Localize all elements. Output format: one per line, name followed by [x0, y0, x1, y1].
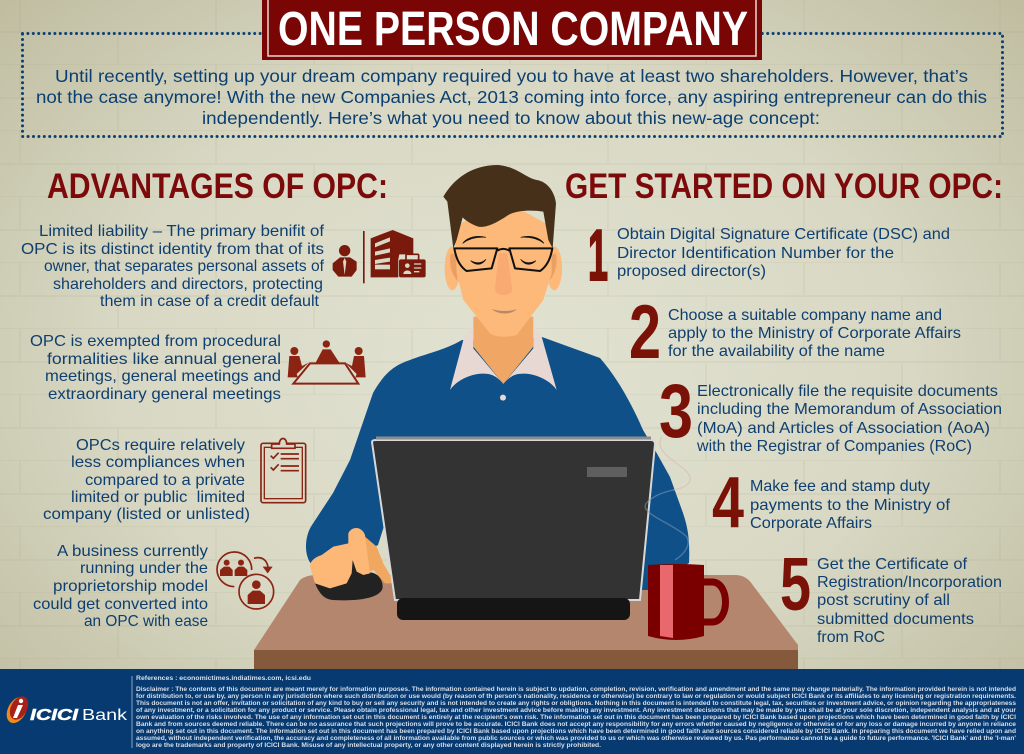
ICICI Bank logo: ICICI: [30, 707, 79, 724]
advantage 3 text: company (listed or unlisted): [43, 506, 250, 523]
intro text: not the case anymore! With the new Companies Act, 2013 coming into force, any aspiring entrepreneur can do this: [36, 87, 987, 107]
step 2: apply to the Ministry of Corporate Affairs: [668, 325, 961, 342]
advantage 3 text: compared to a private: [85, 472, 245, 489]
footer band: [0, 669, 1024, 754]
advantage 4 text: an OPC with ease: [84, 613, 208, 630]
references: References : economictimes.indiatimes.com, icsi.edu: [136, 675, 311, 682]
advantage 1 text: Limited liability – The primary benifit of: [39, 223, 325, 240]
step 3: [659, 369, 1002, 455]
intro text: independently. Here’s what you need to know about this new-age concept:: [202, 108, 820, 128]
hand on mouse: [310, 528, 395, 600]
step 1: proposed director(s): [617, 263, 766, 280]
advantage 1 text: shareholders and directors, protecting: [53, 276, 323, 293]
disclaimer: logo are the trademarks and property of ICICI Bank. Misuse of any intellectual property, or any other content displayed herein is strictly prohibited.: [136, 742, 601, 749]
advantage 2 text: formalities like annual general: [47, 351, 281, 368]
head: [443, 165, 562, 401]
disclaimer: of any investment, or a solicitation for any product or service. Please obtain professional legal, tax and other investment advice before making any investment. Any investment decisions that may be made by you shall be at your sole discretion, independent analysis and at your: [136, 707, 1017, 714]
step 5: submitted documents: [817, 611, 974, 628]
step 5: [780, 542, 1002, 646]
disclaimer: assumed, without independent verification, the accuracy and completeness of all information available from public sources or which was provided to us or which was otherwise reviewed by us. Pas performance cannot be a guide to future performance. 'ICICI Bank' and the 'I-man': [136, 735, 1017, 742]
step 4: 4: [712, 463, 744, 543]
icon: conversion of ownership: [217, 552, 274, 609]
torso and sleeves: [306, 337, 689, 590]
disclaimer: Disclaimer : The contents of this document are meant merely for information purposes. The information contained herein is subject to updation, completion, revision, verification and amendment and the same may change materially. The information provided herein is not intended: [136, 686, 1016, 693]
advantage 4 text: [33, 543, 208, 630]
intro text: [36, 66, 987, 128]
disclaimer: Bank and from sources deemed reliable. There can be no assurance that such projections will prove to be accurate. ICICI Bank does not accept any responsibility for any errors whether caused by negligence or otherwise or for any loss or damage incurred by anyone in reliance: [136, 721, 1017, 728]
step 1: Obtain Digital Signature Certificate (DSC) and: [617, 226, 950, 243]
ICICI Bank logo: Bank: [82, 707, 128, 724]
step 3: Electronically file the requisite documents: [697, 383, 998, 400]
step 2: [629, 290, 961, 375]
step 3: with the Registrar of Companies (RoC): [696, 438, 972, 455]
step 1: Director Identification Number for the: [617, 245, 894, 262]
advantage 3 text: less compliances when: [71, 454, 245, 471]
step 4: [712, 463, 951, 543]
advantage 4 text: could get converted into: [33, 596, 208, 613]
heading: advantages: ADVANTAGES OF OPC:: [47, 167, 388, 206]
footer divider: [132, 676, 133, 748]
intro dotted frame: [22, 34, 1002, 136]
step 5: Registration/Incorporation: [817, 574, 1002, 591]
steam: [645, 437, 690, 560]
title banner: ONE PERSON COMPANY: [278, 3, 748, 56]
advantage 3 text: limited or public limited: [71, 489, 245, 506]
advantage 1 text: [21, 223, 325, 310]
disclaimer: for distribution to, or use by, any person in any jurisdiction where such distribution or use would (by reason of th person's nationality, residence or otherwise) be contrary to law or regulation or would subject ICICI Bank or its affiliates to any licensing or registration requirements.: [136, 693, 1016, 700]
step 4: payments to the Ministry of: [750, 497, 951, 514]
step 1: [588, 216, 950, 296]
step 1: 1: [588, 216, 608, 296]
advantage 1 text: them in case of a credit default: [100, 293, 320, 310]
step 5: post scrutiny of all: [817, 592, 950, 609]
step 2: Choose a suitable company name and: [668, 307, 942, 324]
advantage 1 text: OPC is its distinct identity from that of its: [21, 241, 324, 258]
step 4: Corporate Affairs: [750, 515, 872, 532]
step 5: 5: [780, 542, 811, 626]
intro text: Until recently, setting up your dream company required you to have at least two shareholders. However, that’s: [55, 66, 968, 86]
advantage 2 text: OPC is exempted from procedural: [30, 333, 281, 350]
step 5: from RoC: [817, 629, 885, 646]
advantage 2 text: meetings, general meetings and: [45, 368, 281, 385]
advantage 2 text: [30, 333, 281, 403]
advantage 4 text: A business currently: [57, 543, 208, 560]
disclaimer: This document is not an offer, invitation or solicitation of any kind to buy or sell any security and is not intended to create any rights or obligtions. Nothing in this document is intended to constitute legal, tax, securities or investment advice, or opinion regarding the appropriateness: [136, 700, 1017, 707]
laptop: [372, 438, 655, 620]
disclaimer: [136, 686, 1017, 749]
advantage 4 text: running under the: [80, 560, 208, 577]
step 3: (MoA) and Articles of Association (AoA): [697, 420, 990, 437]
disclaimer: own evaluation of the risks involved. The use of any information set out in this document is entirely at the recipient's own risk. The information set out in this document has been prepared by ICICI Bank based upon projections which have been determined in good faith by ICICI: [136, 714, 1016, 721]
step 2: 2: [629, 290, 661, 375]
step 3: 3: [659, 369, 693, 454]
disclaimer: on anything set out in this document. The information set out in this document has been prepared by ICICI Bank based upon projections which have been determined in good faith and sources considered reliable by ICICI Bank. In preparing this document we have relied upon and: [136, 728, 1016, 735]
icon: person and company: [333, 230, 426, 283]
table: [254, 575, 798, 669]
advantage 4 text: proprietorship model: [53, 578, 208, 595]
advantage 3 text: [43, 437, 250, 523]
icon: checklist clipboard: [261, 438, 306, 503]
step 5: Get the Certificate of: [817, 556, 968, 573]
icon: meeting table: [288, 340, 366, 384]
step 3: including the Memorandum of Association: [697, 401, 1002, 418]
step 4: Make fee and stamp duty: [750, 478, 930, 495]
coffee mug: [648, 564, 726, 640]
advantage 1 text: owner, that separates personal assets of: [44, 258, 325, 275]
ICICI Bank logo: [2, 693, 128, 727]
advantage 3 text: OPCs require relatively: [76, 437, 245, 454]
step 2: for the availability of the name: [668, 343, 885, 360]
advantage 2 text: extraordinary general meetings: [48, 386, 281, 403]
illustration: man: [306, 165, 689, 600]
